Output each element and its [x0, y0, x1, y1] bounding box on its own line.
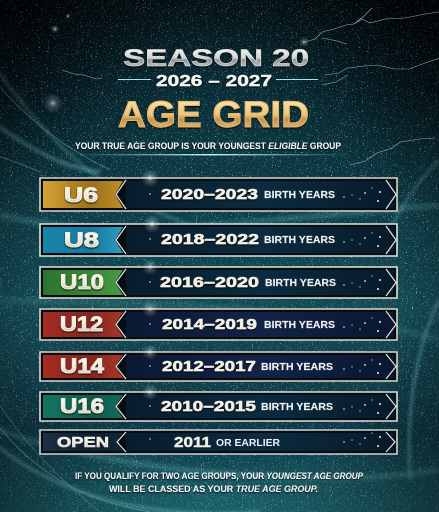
row: Open: OPEN: [57, 434, 109, 451]
row: U12: 2014–2019: [162, 316, 257, 333]
row: Open: OR EARLIER: [216, 438, 281, 449]
row: Open: [40, 430, 397, 454]
row: U14: 2012–2017: [162, 358, 256, 375]
row: U12: [40, 301, 397, 340]
footnote: WILL BE CLASSED AS YOUR TRUE AGE GROUP.: [109, 484, 318, 494]
row: U12: BIRTH YEARS: [264, 320, 335, 331]
row: Open: 2011: [174, 434, 211, 451]
row: U14: [40, 344, 397, 381]
title: Season 20: SEASON 20: [123, 45, 309, 72]
row: U14: BIRTH YEARS: [261, 362, 333, 373]
row: U8: BIRTH YEARS: [264, 235, 335, 246]
row: U16: 2010–2015: [161, 398, 256, 415]
row: U10: U10: [60, 271, 104, 294]
heading: Age Grid: AGE GRID: [118, 94, 309, 135]
dates: 2026 – 2027: 2026 – 2027: [156, 73, 272, 90]
row: U6: BIRTH YEARS: [264, 190, 335, 201]
footnote: [75, 471, 363, 494]
lightning bolts: [62, 8, 439, 165]
row: U10: BIRTH YEARS: [265, 278, 336, 289]
subtitle: YOUR TRUE AGE GROUP IS YOUR YOUNGEST ELIGIBLE GROUP: [75, 140, 341, 151]
row: U8: U8: [64, 229, 99, 252]
row: U16: U16: [60, 395, 104, 418]
row: U6: U6: [64, 184, 98, 207]
row: U16: [40, 384, 397, 421]
row: U6: [40, 169, 397, 211]
row: U10: [40, 259, 397, 298]
row: U8: [40, 215, 397, 256]
row: U8: 2018–2022: [161, 231, 259, 248]
row: U6: 2020–2023: [161, 186, 258, 203]
row: U12: U12: [60, 313, 103, 336]
row: U10: 2016–2020: [160, 274, 259, 291]
footnote: IF YOU QUALIFY FOR TWO AGE GROUPS, YOUR YOUNGEST AGE GROUP: [75, 471, 363, 481]
row: U16: BIRTH YEARS: [261, 402, 333, 413]
divider: [72, 154, 352, 155]
row: U14: U14: [60, 355, 104, 378]
